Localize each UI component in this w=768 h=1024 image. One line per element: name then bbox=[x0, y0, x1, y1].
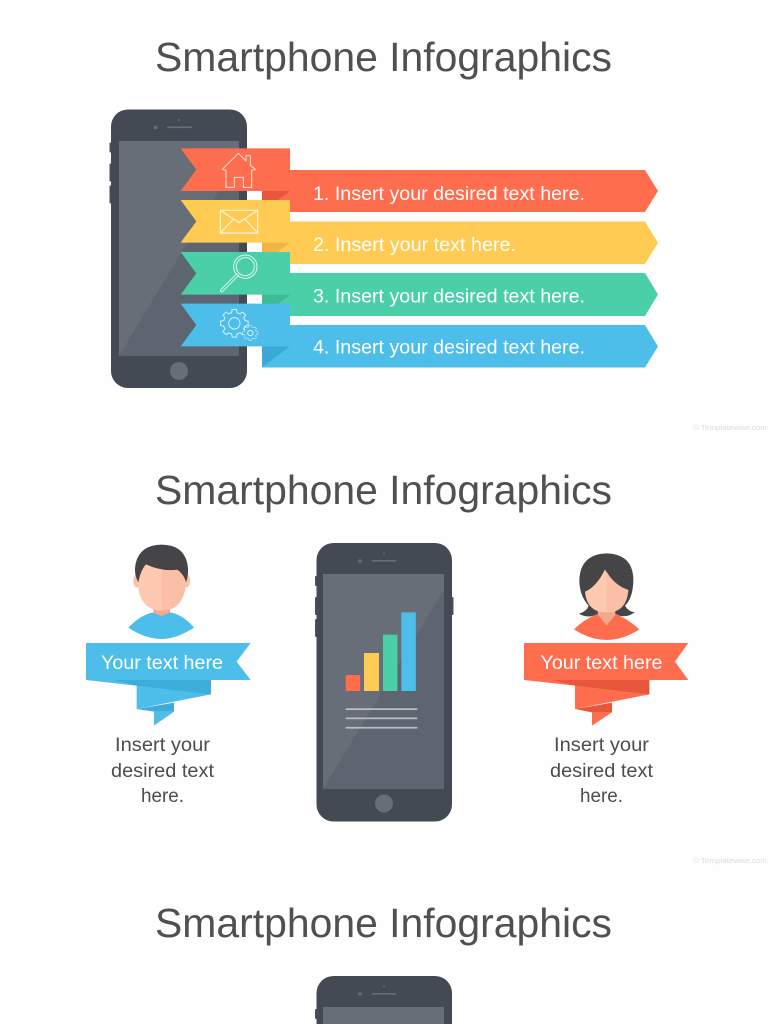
long ribbon 2: yellow: 2. Insert your text here. bbox=[313, 234, 516, 256]
short ribbon 2 with envelope icon bbox=[181, 200, 290, 243]
title: slide 2: Smartphone Infographics bbox=[155, 467, 612, 513]
text block: right: desired text bbox=[550, 760, 654, 782]
text block: right: here. bbox=[580, 785, 623, 807]
icon: magnifying glass bbox=[222, 255, 257, 291]
long ribbon 3: green bbox=[262, 273, 658, 316]
long ribbon 4: blue: 4. Insert your desired text here. bbox=[313, 336, 585, 358]
icon: man bbox=[128, 545, 194, 639]
long ribbon 1: red bbox=[262, 170, 658, 212]
long ribbon 1: red: 1. Insert your desired text here. bbox=[313, 183, 585, 205]
male avatar with blue ribbon bbox=[86, 545, 251, 726]
text block: left bbox=[111, 734, 215, 807]
ribbon label: right: Your text here bbox=[540, 653, 662, 674]
slide 3 bbox=[155, 900, 612, 1024]
bar chart bbox=[346, 612, 416, 691]
ribbon: blue banner bbox=[86, 643, 251, 726]
female avatar with red ribbon bbox=[524, 553, 688, 726]
short ribbon 3 with magnifier icon bbox=[181, 252, 290, 295]
title: slide 1: Smartphone Infographics bbox=[155, 34, 612, 80]
long ribbon 4: blue bbox=[262, 325, 658, 368]
watermark: slide 1: © Templatewise.com bbox=[693, 423, 767, 432]
slide 1 bbox=[110, 34, 767, 432]
icon: gears bbox=[220, 309, 258, 341]
text block: left: desired text bbox=[111, 760, 215, 782]
icon: envelope bbox=[220, 210, 258, 233]
ribbon: red banner bbox=[524, 643, 688, 726]
long ribbon 3: green: 3. Insert your desired text here. bbox=[313, 286, 585, 308]
text lines bbox=[346, 708, 417, 729]
slide 2 bbox=[86, 467, 767, 865]
short ribbon 4 with gears icon bbox=[181, 304, 290, 346]
long ribbon 2: yellow bbox=[262, 222, 658, 264]
text block: left: here. bbox=[141, 785, 184, 807]
icon: house bbox=[222, 153, 255, 187]
phone: slide 1 bbox=[110, 110, 247, 388]
phone: slide 2 with bar chart bbox=[315, 543, 454, 822]
icon: woman bbox=[574, 553, 639, 640]
text block: left: Insert your bbox=[115, 734, 211, 756]
watermark: slide 2: © Templatewise.com bbox=[693, 856, 767, 865]
short ribbon 1 with house icon bbox=[181, 148, 290, 191]
ribbon label: left: Your text here bbox=[101, 653, 223, 674]
text block: right bbox=[550, 734, 654, 807]
phone: slide 3 (cropped at page edge) bbox=[315, 976, 452, 1024]
title: slide 3: Smartphone Infographics bbox=[155, 900, 612, 946]
text block: right: Insert your bbox=[554, 734, 650, 756]
